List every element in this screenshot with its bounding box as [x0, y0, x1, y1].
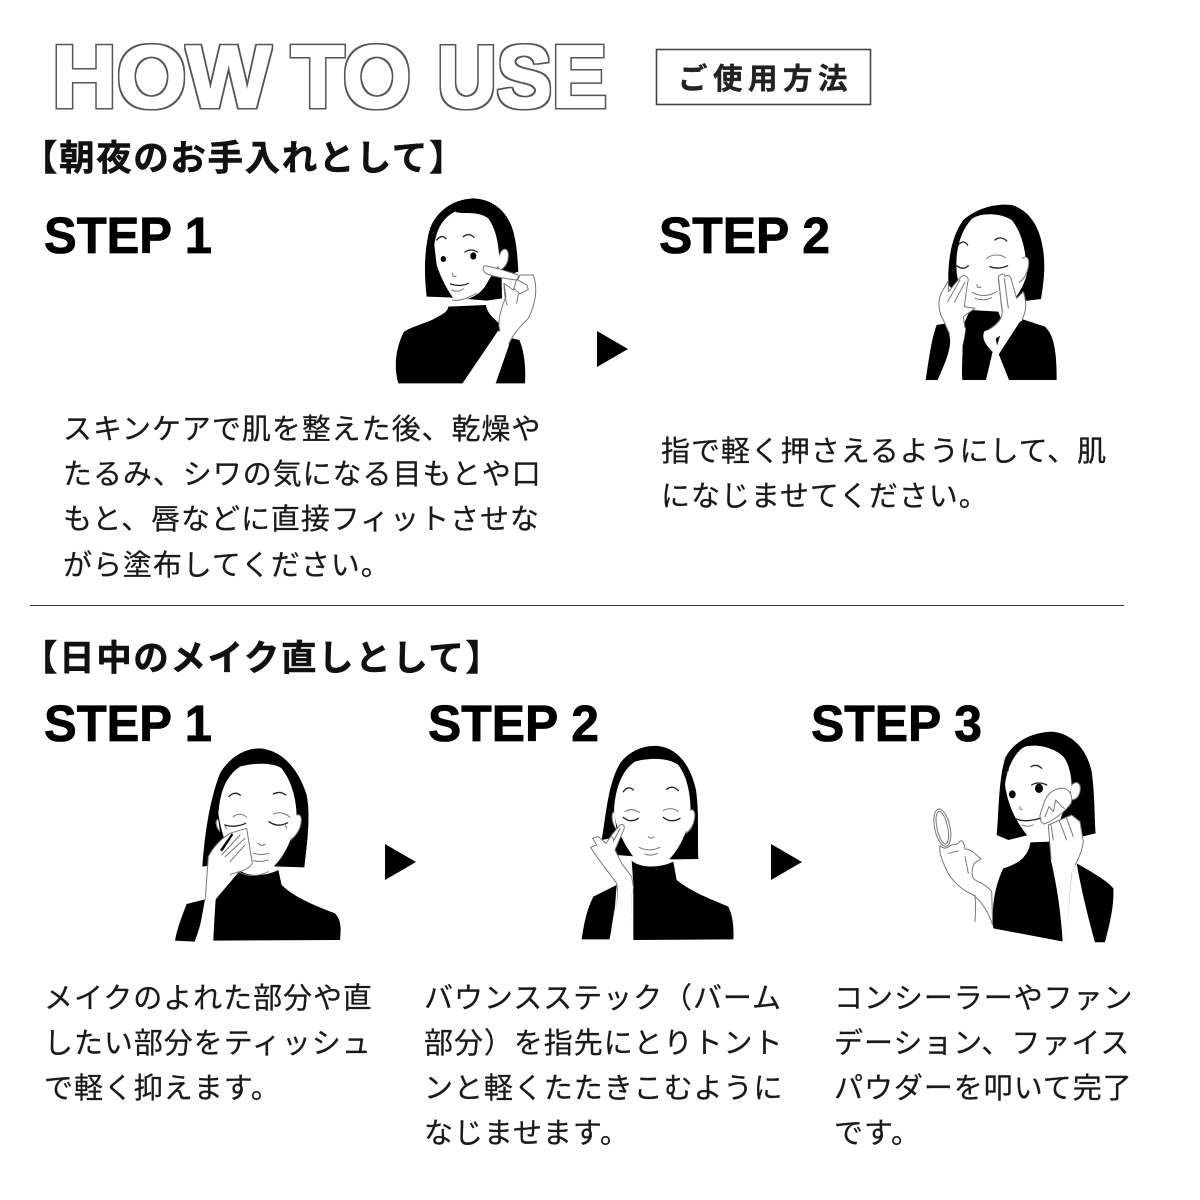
badge: ご使用方法: ご使用方法: [678, 62, 853, 96]
text block: morning step 1: スキンケアで肌を整えた後、乾燥や: [63, 413, 541, 446]
text block: daytime step 3: デーション、ファイス: [834, 1027, 1130, 1060]
text block: daytime step 1: [44, 982, 373, 1105]
illustration: woman applying powder while holding a compact: [931, 732, 1113, 942]
text block: daytime step 2: ンと軽くたたきこむように: [424, 1072, 783, 1105]
step label: daytime step 3: STEP 3: [811, 695, 982, 752]
badge: ご使用方法: [656, 50, 870, 104]
text block: daytime step 3: です。: [834, 1118, 921, 1150]
text block: daytime step 2: バウンスステック（バーム: [424, 983, 782, 1015]
text block: daytime step 1: したい部分をティッシュ: [44, 1027, 372, 1060]
text block: morning step 2: 指で軽く押さえるようにして、肌: [661, 435, 1107, 468]
arrow: [597, 331, 628, 367]
illustration: woman blotting skin with a tissue: [175, 748, 341, 942]
title: HOW TO USE: USE: [437, 27, 607, 126]
text block: morning step 2: になじませてください。: [661, 481, 989, 513]
step label: daytime step 1: STEP 1: [44, 695, 212, 752]
heading: daytime makeup touch-up: 【日中のメイク直しとして】: [22, 638, 503, 678]
text block: daytime step 2: なじませます。: [424, 1118, 630, 1150]
step label: morning step 1: STEP 1: [44, 207, 212, 264]
text block: daytime step 2: [424, 983, 783, 1150]
text block: daytime step 1: メイクのよれた部分や直: [44, 982, 373, 1015]
title: HOW TO USE: [52, 27, 607, 126]
text block: morning step 1: [63, 413, 542, 582]
text block: morning step 1: がら塗布してください。: [63, 549, 391, 582]
illustration: woman applying balm stick to the under-eye: [396, 198, 536, 383]
text block: daytime step 2: 部分）を指先にとりトント: [424, 1027, 783, 1060]
arrow: [771, 844, 802, 880]
arrow: [385, 844, 416, 880]
text block: morning step 1: たるみ、シワの気になる目もとや口: [63, 458, 542, 491]
text block: daytime step 1: で軽く抑えます。: [44, 1072, 281, 1105]
title: HOW TO USE: TO: [291, 27, 411, 126]
illustration: woman tapping balm near the eye with a fingertip: [582, 746, 734, 940]
text block: morning step 1: もと、唇などに直接フィットさせな: [63, 503, 540, 536]
step label: daytime step 2: STEP 2: [428, 695, 599, 752]
illustration: woman pressing fingers under the eyes: [926, 205, 1057, 380]
title: HOW TO USE: HOW: [52, 27, 271, 126]
text block: daytime step 3: [834, 983, 1134, 1150]
text block: daytime step 3: パウダーを叩いて完了: [834, 1072, 1133, 1105]
step label: morning step 2: STEP 2: [659, 207, 830, 264]
text block: daytime step 3: コンシーラーやファン: [834, 983, 1134, 1015]
text block: morning step 2: [661, 435, 1107, 513]
heading: morning and night care: 【朝夜のお手入れとして】: [22, 138, 466, 178]
